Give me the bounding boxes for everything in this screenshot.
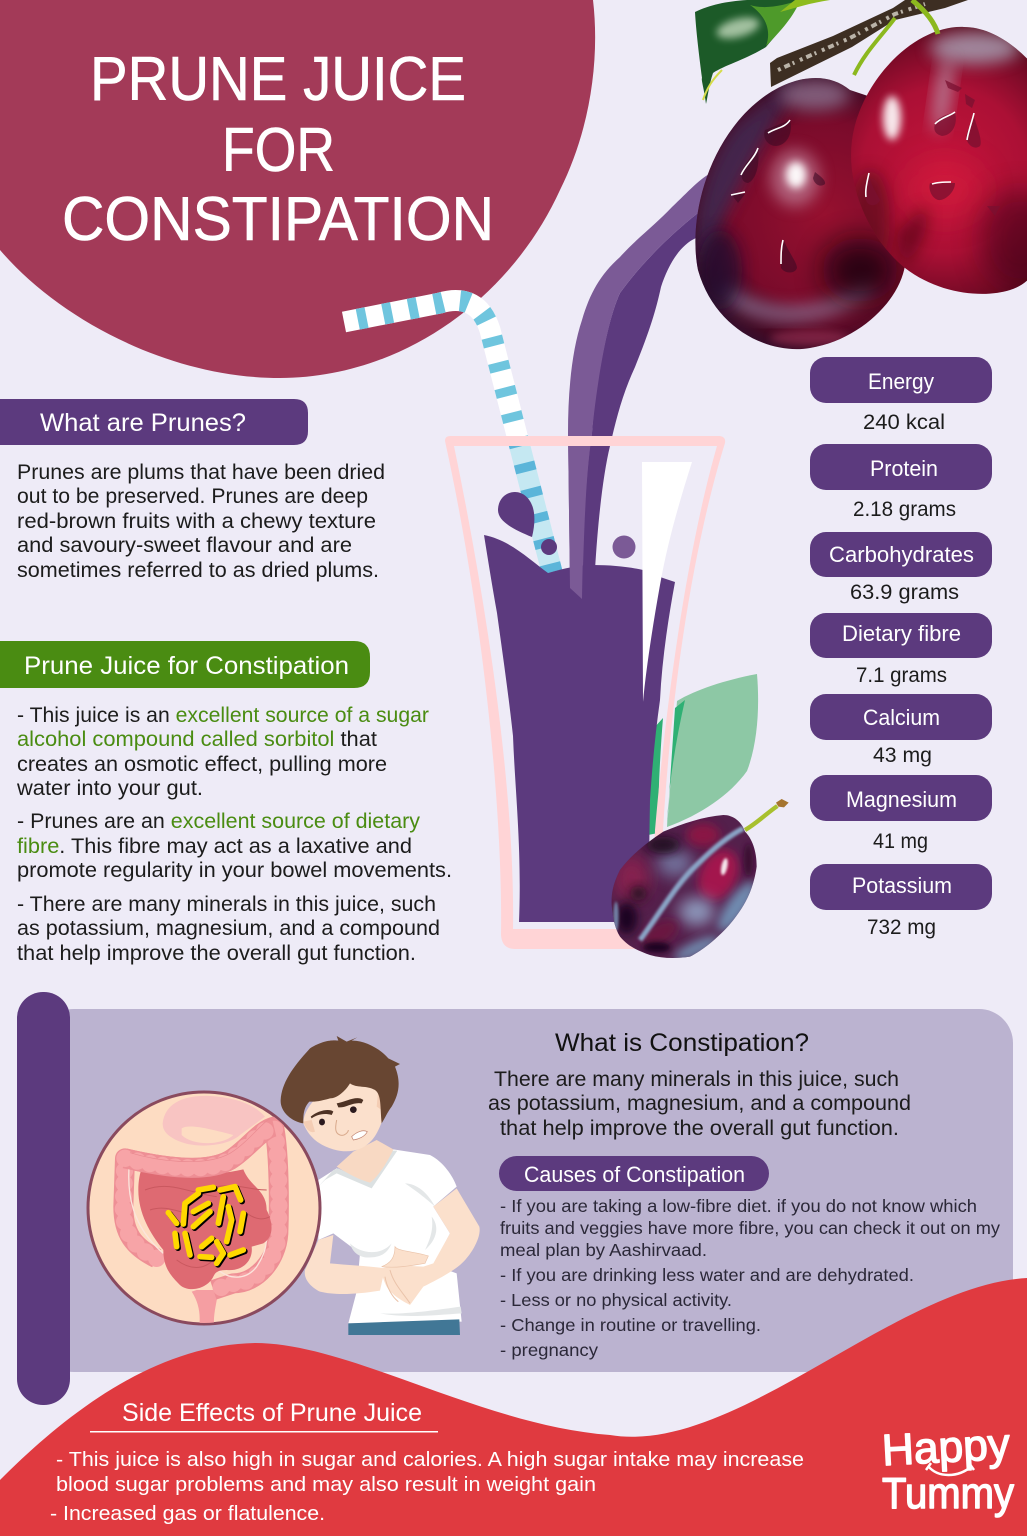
juice pour stream [568, 172, 713, 599]
text block: juice benefits: - Prunes are an excellent source of dietary [17, 810, 421, 833]
nutrient: protein [810, 444, 992, 521]
list: side effects: blood sugar problems and may also result in weight gain [56, 1473, 596, 1496]
title: CONSTIPATION [62, 185, 494, 254]
drinking straw [344, 301, 552, 572]
nutrient: dietary fibre: 7.1 grams [856, 664, 947, 687]
nutrient: energy [810, 357, 992, 434]
plum, left [695, 75, 905, 349]
nutrient: protein: Protein [870, 456, 938, 481]
list: causes: meal plan by Aashirvaad. [500, 1240, 707, 1260]
nutrient: potassium [810, 864, 992, 939]
nutrient: calcium [810, 694, 992, 767]
text block: juice benefits: that help improve the overall gut function. [17, 942, 416, 965]
glass outline [445, 436, 725, 949]
nutrition facts column [810, 357, 992, 939]
nutrient: potassium: 732 mg [867, 916, 936, 939]
heading pill: causes of constipation [499, 1156, 769, 1191]
text block: prunes description: sometimes referred to as dried plums. [17, 559, 379, 582]
nutrient: calcium: 43 mg [873, 744, 932, 767]
text block: juice benefits: alcohol compound called sorbitol that [17, 728, 377, 751]
text block: juice benefits: fibre. This fibre may act as a laxative and [17, 835, 412, 858]
text block: prunes description: Prunes are plums that have been dried [17, 461, 385, 484]
list: causes: - pregnancy [500, 1340, 598, 1360]
juice in glass [484, 433, 692, 922]
nutrient: magnesium [810, 775, 992, 853]
text block: prunes description: red-brown fruits with a chewy texture [17, 510, 376, 533]
nutrient: carbohydrates [810, 532, 992, 604]
illustration: intestines magnifier [88, 1092, 320, 1325]
text block: juice benefits: as potassium, magnesium, and a compound [17, 917, 440, 940]
nutrient: carbohydrates: Carbohydrates [829, 542, 974, 567]
nutrient: dietary fibre [810, 613, 992, 687]
title: FOR [222, 116, 335, 185]
list: causes [500, 1196, 1000, 1360]
title [62, 45, 494, 254]
text block: juice benefits: - There are many minerals in this juice, such [17, 893, 436, 916]
heading: what is constipation: What is Constipation? [555, 1029, 809, 1057]
paragraph: constipation description: that help improve the overall gut function. [500, 1117, 899, 1140]
list: side effects [50, 1448, 804, 1525]
nutrient: calcium: Calcium [863, 705, 940, 730]
nutrient: magnesium: Magnesium [846, 787, 957, 812]
panel: side effects wave [0, 1278, 1027, 1536]
section: what are prunes [0, 399, 385, 582]
text block: juice benefits: creates an osmotic effect, pulling more [17, 753, 387, 776]
paragraph: constipation description [488, 1068, 911, 1140]
nutrient: dietary fibre: Dietary fibre [842, 621, 961, 646]
list: causes: - Less or no physical activity. [500, 1290, 732, 1310]
text block: what is constipation [488, 1029, 1000, 1360]
nutrient: potassium: Potassium [852, 873, 952, 898]
nutrient: energy: Energy [868, 369, 934, 394]
text block: juice benefits: promote regularity in your bowel movements. [17, 859, 452, 882]
glass leaf [648, 674, 758, 835]
list: causes: - If you are taking a low-fibre diet. if you do not know which [500, 1196, 977, 1216]
nutrient: energy: 240 kcal [863, 411, 945, 434]
heading pill: what are prunes [0, 399, 308, 445]
list: causes: fruits and veggies have more fibre, you can check it out on my [500, 1218, 1000, 1238]
text block: juice benefits [16, 704, 452, 965]
text block: prunes description: out to be preserved. Prunes are deep [17, 485, 368, 508]
text block: side effects [50, 1399, 804, 1525]
plum, right [850, 0, 1027, 294]
logo: Happy Tummy [881, 1420, 1014, 1518]
paragraph: constipation description: There are many minerals in this juice, such [494, 1068, 899, 1091]
logo: Happy Tummy: Happy [881, 1420, 1011, 1475]
panel accent bar [17, 992, 70, 1405]
nutrient: magnesium: 41 mg [873, 830, 928, 853]
title: PRUNE JUICE [90, 45, 466, 114]
illustration: person holding stomach [281, 1036, 480, 1335]
heading pill: prune juice for constipation: Prune Juice for Constipation [24, 652, 349, 680]
paragraph: constipation description: as potassium, magnesium, and a compound [488, 1092, 911, 1115]
list: causes: - Change in routine or travelling. [500, 1315, 761, 1335]
text block: prunes description [17, 461, 385, 582]
logo: Happy Tummy: Tummy [882, 1469, 1014, 1518]
heading: side effects: Side Effects of Prune Juice [122, 1399, 422, 1427]
list: side effects: - This juice is also high in sugar and calories. A high sugar intake may increase [56, 1448, 804, 1471]
nutrient: carbohydrates: 63.9 grams [850, 581, 959, 604]
heading pill: what are prunes: What are Prunes? [40, 409, 246, 437]
list: side effects: - Increased gas or flatulence. [50, 1502, 325, 1525]
heading pill: causes of constipation: Causes of Constipation [524, 1162, 745, 1187]
text block: prunes description: and savoury-sweet flavour and are [17, 534, 352, 557]
section: prune juice for constipation [0, 641, 452, 965]
text block: juice benefits: - This juice is an excellent source of a sugar [17, 704, 429, 727]
list: causes: - If you are drinking less water and are dehydrated. [500, 1265, 914, 1285]
title circle [0, 0, 595, 378]
text block: juice benefits: water into your gut. [16, 777, 203, 800]
panel: what is constipation [40, 1009, 1013, 1372]
heading pill: prune juice for constipation [0, 641, 370, 688]
nutrient: protein: 2.18 grams [853, 498, 956, 521]
plum branch and leaf [695, 0, 968, 104]
icon: halved plum with stem [612, 799, 789, 966]
